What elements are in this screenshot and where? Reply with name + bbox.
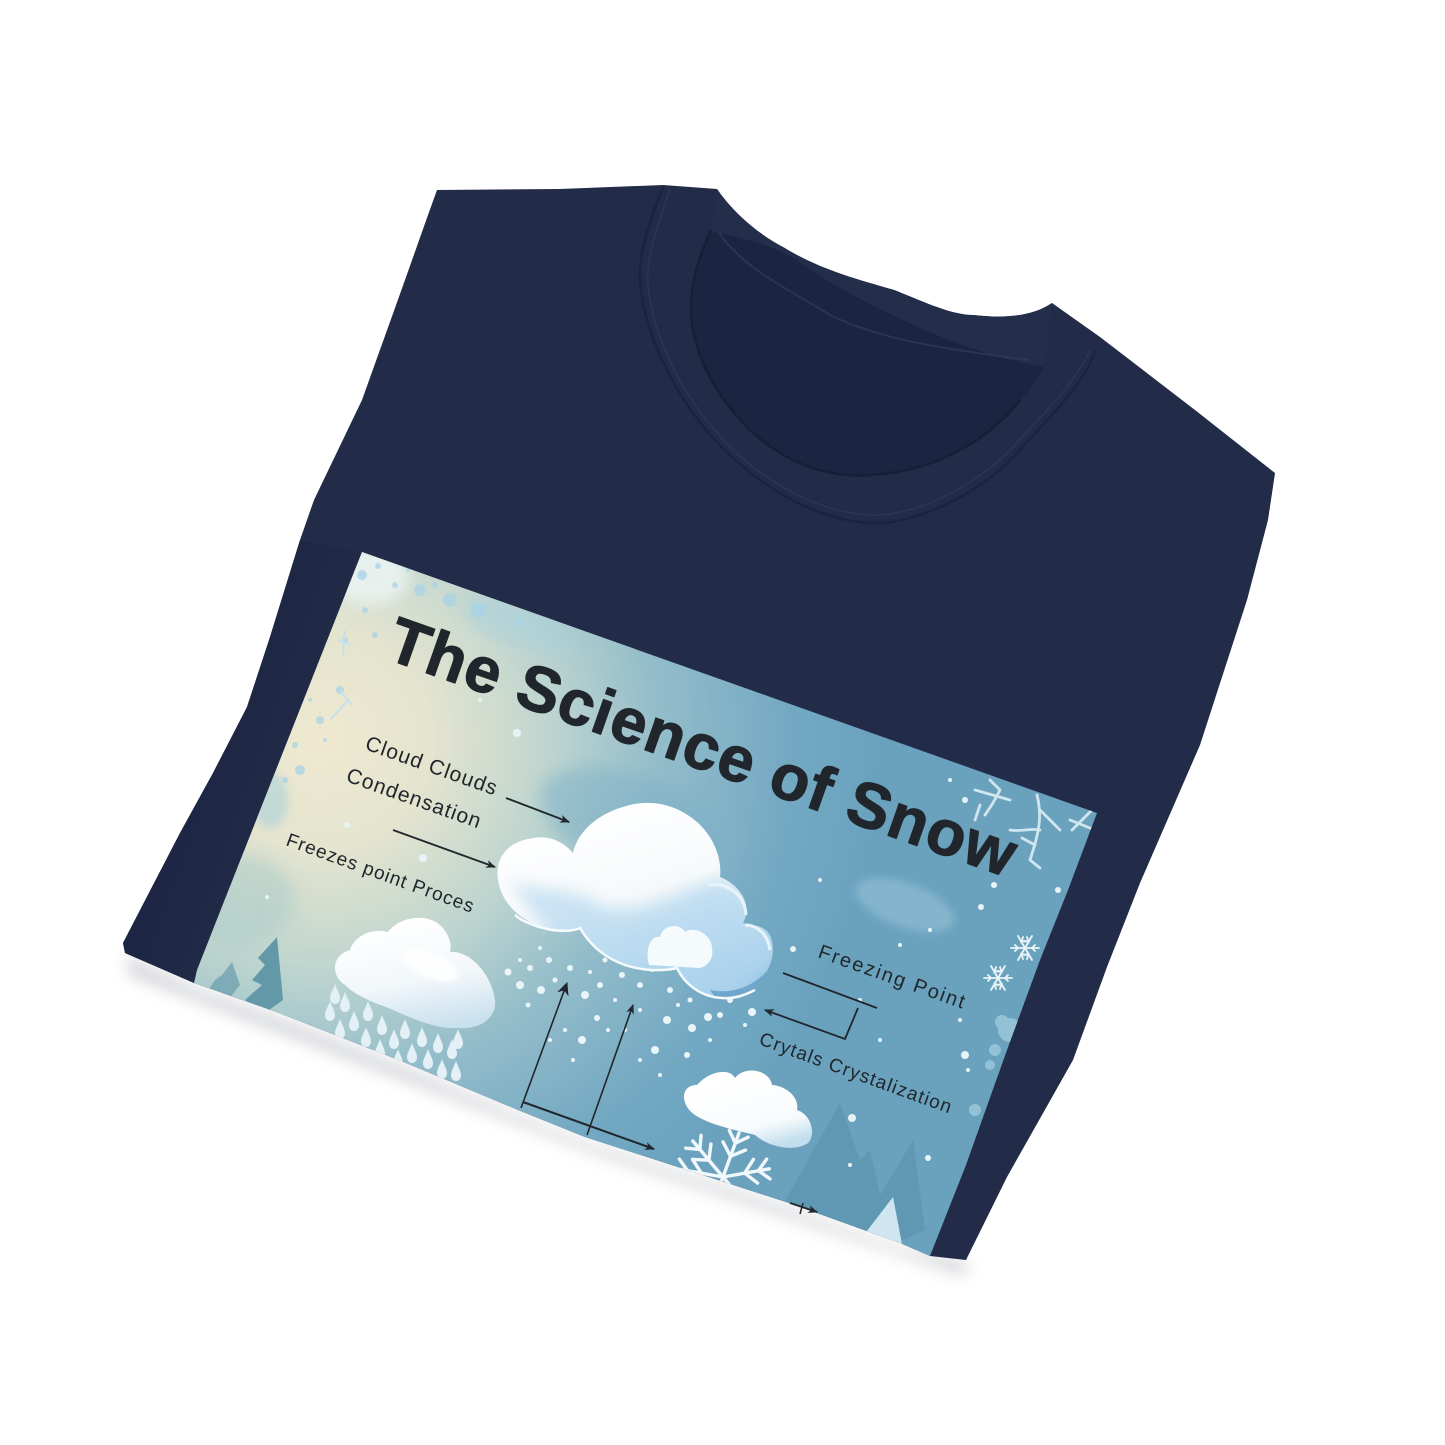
ice peak: [867, 1197, 902, 1244]
label: Crytals Crystalization: Crytals Crystalization: [756, 1029, 954, 1118]
arrow: cloud clouds to main cloud: [506, 798, 569, 822]
label: Freezing Point: Freezing Point: [815, 941, 968, 1014]
icon: main cloud: [497, 803, 780, 1010]
line: freezing point: [783, 973, 877, 1008]
arrow: vertical up right: [587, 1005, 633, 1135]
inner neck back: [691, 230, 1044, 475]
back collar band: [712, 189, 1052, 367]
arrow: condensation to main cloud: [393, 830, 495, 867]
frost blotches top-left: [282, 563, 525, 783]
mountains right: [780, 1103, 925, 1250]
frost blobs right: [969, 1015, 1022, 1116]
icon: rain cloud left: [325, 918, 495, 1081]
panel artwork background: [194, 552, 1097, 1256]
arrow: small bottom right: [790, 1203, 817, 1214]
arrow: vertical up left: [521, 983, 567, 1108]
t-shirt mockup with printed infographic: [122, 185, 1275, 1280]
label: Freezes point Proces: Freezes point Proces: [283, 830, 477, 917]
left edge shading on shirt: [123, 540, 362, 983]
arrow: freezing to crystals elbow: [765, 1008, 858, 1039]
title: The Science of Snow: [379, 603, 1026, 891]
small snowflakes right: [1011, 936, 1039, 960]
trees left: [210, 937, 283, 1010]
drop shadow under shirt: [125, 955, 966, 1276]
arrow: horizontal to snowflake: [523, 1102, 654, 1149]
label: Cloud Clouds: Cloud Clouds: [362, 732, 500, 800]
icon: small cloud right: [684, 1071, 812, 1148]
snow dots below main cloud: [504, 946, 756, 1077]
collar stitching lines: [640, 187, 1096, 523]
background white specks: [265, 698, 1067, 1167]
label: Condensation: Condensation: [343, 764, 484, 833]
raindrops: [325, 984, 463, 1081]
collar: neck opening: [640, 187, 1096, 523]
t-shirt body: [123, 185, 1275, 1260]
icon: snowflake: [678, 1128, 772, 1185]
frost branches top right: [975, 780, 1095, 868]
panel: printed infographic: [194, 552, 1097, 1256]
pale corner top-left: [342, 552, 415, 610]
